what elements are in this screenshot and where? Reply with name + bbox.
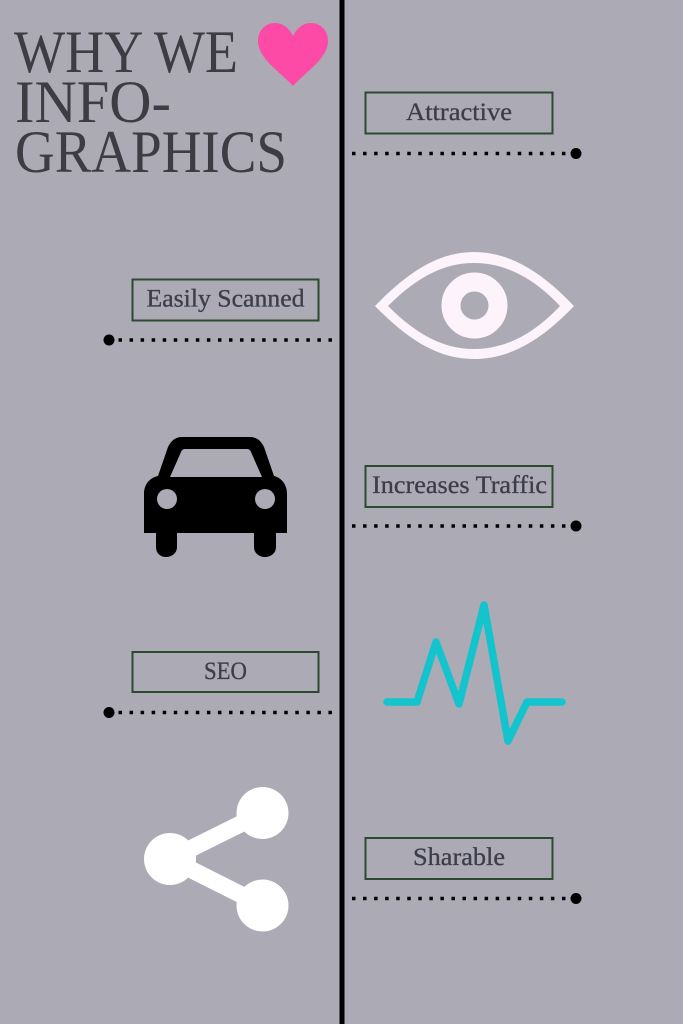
- label: SEO: [132, 652, 318, 692]
- title: INFO-: [15, 69, 171, 135]
- title: WHY WE: [14, 19, 238, 85]
- label: Attractive: Attractive: [406, 99, 512, 126]
- label: Increases Traffic: Increases Traffic: [372, 472, 547, 499]
- label: Sharable: [366, 838, 552, 879]
- label: Easily Scanned: Easily Scanned: [146, 286, 305, 312]
- icon: pulse line: [387, 605, 562, 741]
- title: GRAPHICS: [15, 119, 287, 185]
- connector: Easily Scanned: [104, 334, 334, 346]
- icon: heart: [258, 23, 328, 86]
- connector: Attractive: [352, 148, 582, 159]
- label: Sharable: Sharable: [413, 844, 505, 871]
- icon: car: [144, 437, 287, 557]
- title: [14, 19, 287, 185]
- icon: share: [144, 787, 288, 932]
- icon: eye: [375, 252, 574, 359]
- central vertical timeline: [340, 0, 344, 1024]
- label: Increases Traffic: [366, 466, 552, 507]
- label: Easily Scanned: [132, 280, 318, 320]
- connector: SEO: [104, 707, 334, 718]
- label: SEO: SEO: [204, 658, 247, 685]
- connector: Sharable: [352, 893, 582, 904]
- connector: Increases Traffic: [352, 520, 582, 532]
- label: Attractive: [366, 92, 552, 134]
